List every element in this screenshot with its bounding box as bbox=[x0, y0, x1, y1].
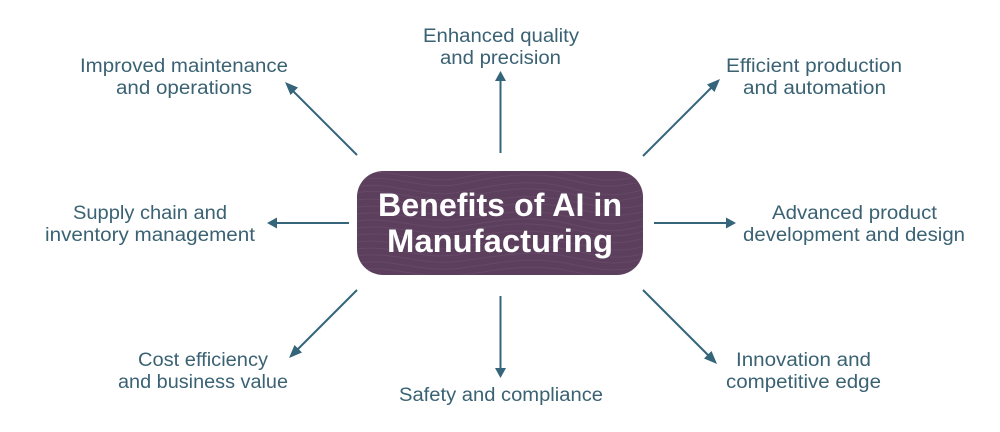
label: Advanced product development and design: development and design bbox=[743, 225, 965, 246]
label: Innovation and competitive edge: Innovation and bbox=[736, 350, 871, 371]
label: Efficient production and automation bbox=[726, 56, 902, 99]
label: Enhanced quality and precision: and precision bbox=[440, 48, 561, 69]
label: Enhanced quality and precision bbox=[423, 26, 580, 69]
label: Supply chain and inventory management bbox=[45, 203, 256, 246]
label: Advanced product development and design: Advanced product bbox=[772, 203, 938, 224]
label: Advanced product development and design bbox=[743, 203, 965, 246]
label: Safety and compliance: Safety and compliance bbox=[399, 385, 603, 406]
arrow: to Advanced product bbox=[654, 218, 736, 228]
label: Cost efficiency and business value bbox=[118, 350, 288, 393]
label: Enhanced quality and precision: Enhanced quality bbox=[423, 26, 580, 47]
label: Innovation and competitive edge bbox=[726, 350, 881, 393]
label: Supply chain and inventory management: Supply chain and bbox=[73, 203, 227, 224]
arrow: to Efficient production bbox=[643, 79, 720, 156]
label: Cost efficiency and business value: Cost efficiency bbox=[138, 350, 269, 371]
label: Improved maintenance and operations bbox=[80, 56, 288, 99]
label: Efficient production and automation: Efficient production bbox=[726, 56, 902, 77]
arrow: to Enhanced quality bbox=[495, 71, 506, 153]
arrow: to Improved maintenance bbox=[285, 82, 357, 155]
heading: Benefits of AI in bbox=[378, 187, 622, 223]
label: Innovation and competitive edge: competitive edge bbox=[726, 372, 881, 393]
heading: Manufacturing bbox=[387, 223, 613, 259]
arrow: to Safety and compliance bbox=[495, 296, 506, 378]
label: Efficient production and automation: and automation bbox=[743, 78, 886, 99]
heading bbox=[378, 187, 622, 259]
central panel: Benefits of AI in Manufacturing bbox=[350, 169, 650, 277]
arrow: to Cost efficiency bbox=[289, 290, 357, 358]
arrow: to Supply chain bbox=[267, 218, 349, 228]
label: Improved maintenance and operations: and operations bbox=[116, 78, 252, 99]
label: Supply chain and inventory management: inventory management bbox=[45, 225, 256, 246]
arrow: to Innovation bbox=[643, 290, 717, 364]
label: Cost efficiency and business value: and business value bbox=[118, 372, 288, 393]
label: Improved maintenance and operations: Improved maintenance bbox=[80, 56, 288, 77]
